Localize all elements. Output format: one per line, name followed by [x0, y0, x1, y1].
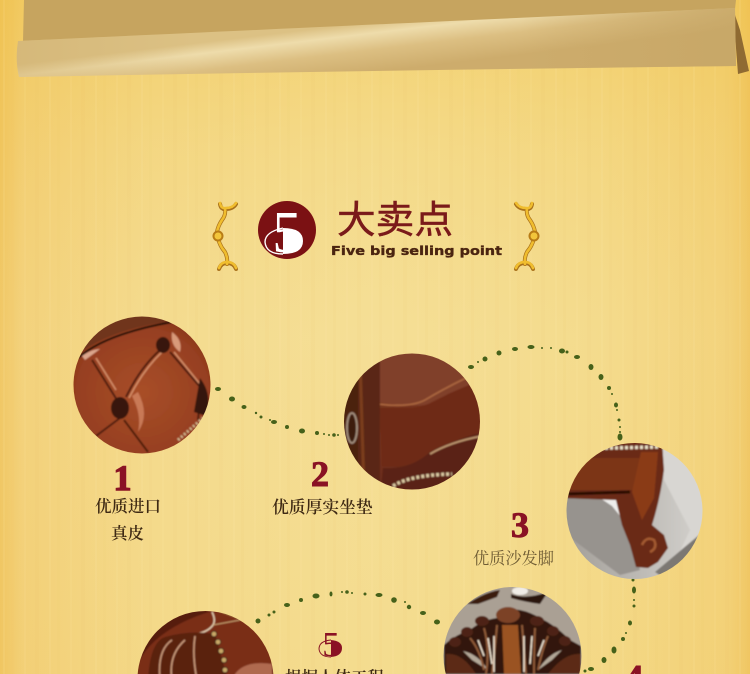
label 1: 真皮	[111, 523, 144, 543]
dotted path: 2 to 3	[468, 345, 622, 440]
label 2: 优质厚实坐垫	[272, 498, 373, 517]
icon: number badge	[258, 199, 316, 265]
number 2: 2	[311, 454, 329, 494]
photo 2: thick seat cushion	[344, 354, 480, 490]
title block	[214, 199, 538, 269]
dotted path: 1 to 2	[215, 387, 339, 437]
subheading: Five big selling point	[331, 243, 502, 258]
photo 5: rolled arm with nailheads	[138, 611, 274, 674]
number 3: 3	[511, 505, 529, 545]
label 3: 优质沙发脚	[473, 550, 554, 568]
icon: number badge: 5	[272, 199, 302, 265]
label 1: 优质进口	[95, 497, 161, 516]
label 1	[95, 497, 161, 543]
photo 4: carved shell	[440, 585, 585, 674]
icon: left gold ornament	[214, 203, 236, 269]
dotted path: 3 to 4	[584, 578, 636, 672]
photo 1: tufted leather	[70, 314, 215, 455]
dotted path: 4 to 5	[256, 590, 440, 624]
icon: right gold ornament	[516, 203, 538, 269]
photo 3: carved sofa foot	[566, 443, 702, 579]
rolled paper scroll	[17, 0, 749, 77]
number 1: 1	[114, 458, 132, 498]
number 5: 5	[322, 625, 340, 664]
heading: 大卖点: 大卖点	[337, 200, 453, 242]
